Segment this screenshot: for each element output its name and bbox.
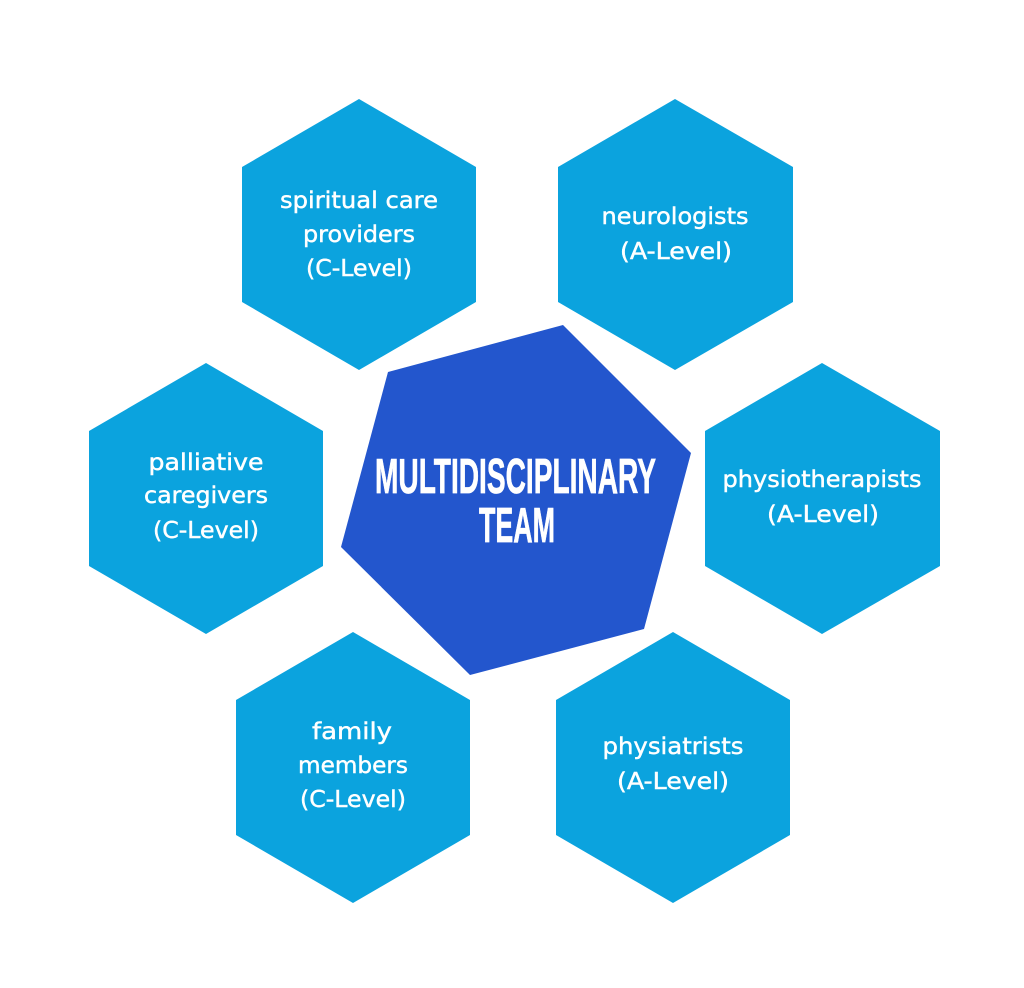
hexagon: neurologists: neurologists [602, 204, 748, 230]
hexagon: spiritual care providers: providers [303, 222, 415, 248]
hexagon: spiritual care providers [242, 99, 476, 370]
hexagon: family members: family [312, 719, 392, 745]
center heptagon: multidisciplinary team [341, 325, 691, 675]
hexagon: palliative caregivers: palliative [148, 450, 264, 476]
hexagon: physiotherapists: physiotherapists [722, 467, 922, 493]
hexagon: neurologists [558, 99, 793, 370]
hexagon: physiatrists [556, 632, 790, 903]
hexagon: physiotherapists [705, 363, 940, 634]
center heptagon: multidisciplinary team: MULTIDISCIPLINARY [375, 450, 656, 504]
hexagon: family members: (C-Level) [300, 787, 406, 813]
center heptagon: multidisciplinary team: TEAM [479, 499, 555, 553]
hexagon: palliative caregivers: (C-Level) [153, 518, 259, 544]
hexagon: palliative caregivers: caregivers [144, 483, 268, 509]
hexagon: spiritual care providers: (C-Level) [306, 256, 412, 282]
hexagon: palliative caregivers [89, 363, 323, 634]
hexagon: neurologists: (A-Level) [620, 239, 732, 265]
hexagon: physiatrists: physiatrists [602, 734, 744, 760]
hexagon: physiatrists: (A-Level) [617, 769, 729, 795]
hexagon: family members [236, 632, 470, 903]
hexagon: spiritual care providers: spiritual care [280, 188, 438, 214]
hexagon: family members: members [298, 753, 408, 779]
hexagon: physiotherapists: (A-Level) [767, 502, 879, 528]
